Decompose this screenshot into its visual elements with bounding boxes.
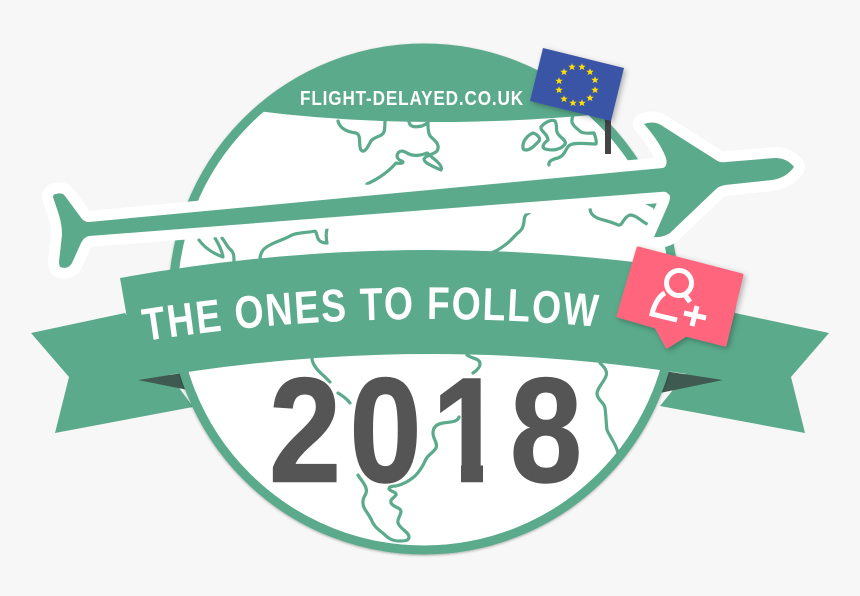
continent outlines <box>199 113 657 541</box>
main ribbon <box>120 250 741 380</box>
site name: FLIGHT-DELAYED.CO.UK <box>300 88 524 110</box>
ribbon fold left <box>138 373 188 390</box>
ribbon tail right <box>660 313 829 433</box>
ribbon tail left <box>31 313 193 433</box>
flag pole <box>605 118 611 154</box>
year: 0 <box>349 347 422 514</box>
ribbon heading: THE ONES TO FOLLOW <box>140 287 600 340</box>
icon: add user <box>652 270 706 326</box>
EU flag <box>530 48 624 121</box>
ribbon fold right <box>660 371 723 393</box>
globe disc <box>173 48 675 550</box>
year: 1 <box>432 347 504 514</box>
top band <box>264 52 588 122</box>
year: 8 <box>510 347 582 514</box>
digit one base trim <box>428 464 509 487</box>
follow badge <box>618 248 742 347</box>
airplane <box>53 123 794 268</box>
year: 2 <box>269 347 341 514</box>
